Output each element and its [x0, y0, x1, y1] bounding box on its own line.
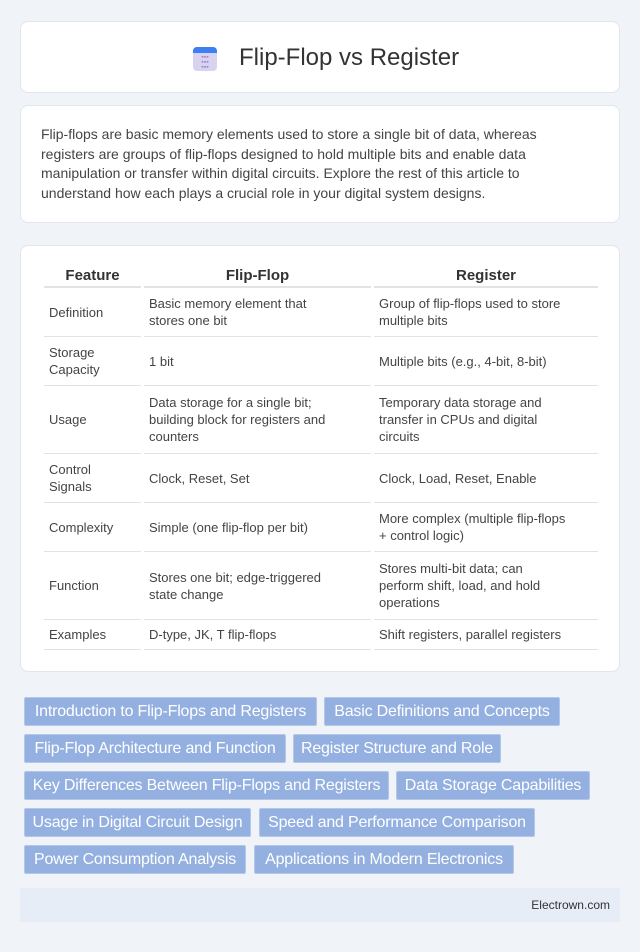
comparison table card: transfer in CPUs and digital — [379, 412, 537, 427]
comparison table card: Stores one bit; edge-triggered — [149, 570, 321, 584]
comparison table card: multiple bits — [379, 313, 448, 328]
comparison table card: Flip-Flop — [226, 266, 289, 284]
icon: calculator: ▪▪▪ — [201, 59, 209, 66]
topic tags: Introduction to Flip-Flops and Registers — [35, 703, 306, 720]
comparison table card: Function — [49, 578, 99, 593]
topic tags: Flip-Flop Architecture and Function — [34, 740, 276, 757]
topic tags: Key Differences Between Flip-Flops and Registers — [33, 777, 380, 794]
comparison table card: Feature — [65, 266, 120, 284]
intro text card: Flip-flops are basic memory elements used to store a single bit of data, whereas registers are groups of flip-flops designed to hold multiple bits and enable data manipulation or transfer within digital circuits. Explore the rest of this article to understand how each plays a crucial role in your digital system designs. — [41, 126, 537, 200]
comparison table card: D-type, JK, T flip-flops — [149, 627, 276, 642]
comparison table card: Definition — [49, 304, 103, 320]
comparison table card: perform shift, load, and hold — [379, 578, 540, 593]
comparison table card: Clock, Reset, Set — [149, 470, 249, 486]
comparison table card: Storage Capacity — [49, 345, 100, 377]
comparison table card: Control Signals — [49, 462, 92, 494]
comparison table card: Stores multi-bit data; can — [379, 561, 523, 576]
comparison table card: More complex (multiple flip-flops — [379, 511, 565, 526]
topic tags: Basic Definitions and Concepts — [334, 703, 550, 720]
comparison table card: state change — [149, 586, 223, 602]
comparison table card: 1 bit — [149, 354, 174, 368]
comparison table card: Usage — [49, 412, 87, 427]
icon: calculator: ▪▪▪ — [201, 64, 209, 71]
comparison table card: Shift registers, parallel registers — [379, 627, 561, 642]
comparison table card: + control logic) — [379, 528, 464, 543]
comparison table card: Data storage for a single bit; — [149, 395, 312, 410]
comparison table card: Clock, Load, Reset, Enable — [379, 470, 537, 486]
topic tags: Usage in Digital Circuit Design — [33, 814, 242, 831]
topic tags: Applications in Modern Electronics — [265, 851, 503, 868]
comparison table card — [20, 245, 620, 672]
header card — [20, 21, 620, 93]
title: Flip-Flop vs Register — [239, 44, 459, 71]
comparison table card: Temporary data storage and — [379, 395, 542, 410]
intro text card — [20, 105, 620, 223]
comparison table card: Complexity — [49, 520, 113, 534]
comparison table card: Examples — [49, 627, 106, 642]
comparison table card: Basic memory element that — [149, 296, 307, 311]
topic tags: Power Consumption Analysis — [34, 851, 236, 868]
icon: calculator — [193, 47, 217, 71]
comparison table card: circuits — [379, 429, 419, 444]
comparison table card: stores one bit — [149, 313, 227, 328]
comparison table card: counters — [149, 429, 199, 444]
footer: Electrown.com — [531, 898, 610, 912]
topic tags: Register Structure and Role — [301, 740, 493, 757]
comparison table card: Register — [456, 266, 516, 284]
icon: calculator: ▪▪▪ — [201, 54, 209, 61]
comparison table card: building block for registers and — [149, 412, 325, 427]
topic tags — [24, 697, 590, 874]
topic tags: Data Storage Capabilities — [405, 777, 581, 794]
comparison table card: Multiple bits (e.g., 4-bit, 8-bit) — [379, 354, 547, 368]
topic tags: Speed and Performance Comparison — [268, 814, 526, 831]
comparison table card: Simple (one flip-flop per bit) — [149, 520, 308, 534]
comparison table card: operations — [379, 595, 440, 610]
comparison table card: Group of flip-flops used to store — [379, 296, 560, 311]
footer — [20, 888, 620, 922]
